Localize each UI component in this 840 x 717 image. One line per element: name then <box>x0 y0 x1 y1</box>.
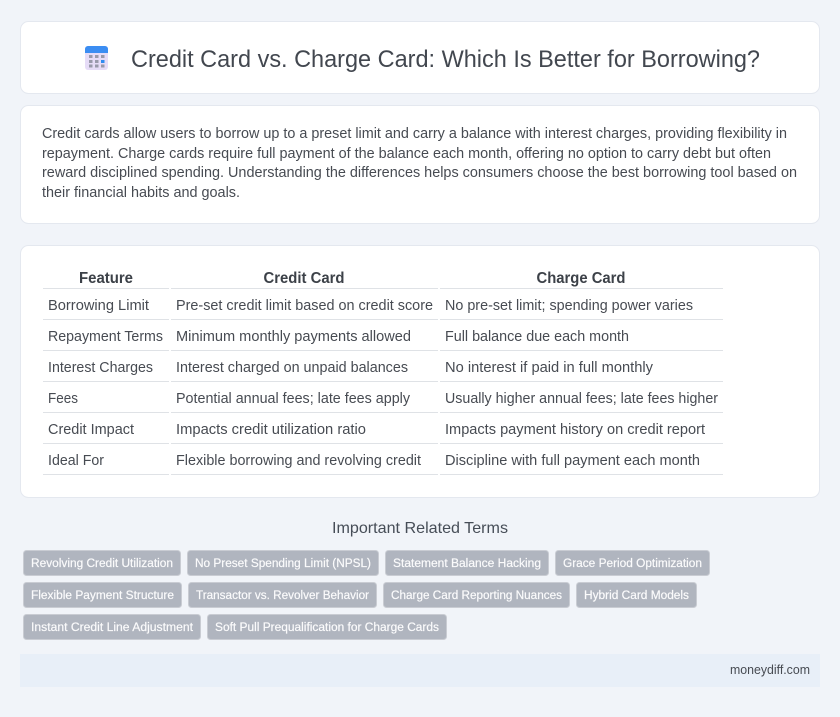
row: interest charges: Interest Charges <box>48 360 153 376</box>
row: fees: Usually higher annual fees; late fees higher <box>445 391 718 407</box>
row: repayment terms: Full balance due each month <box>445 329 629 345</box>
row: ideal for: Flexible borrowing and revolving credit <box>176 453 421 469</box>
row: repayment terms: Minimum monthly payments allowed <box>176 329 411 345</box>
panel: comparison table <box>20 246 820 498</box>
row: borrowing limit: Pre-set credit limit based on credit score <box>176 298 433 314</box>
header panel <box>20 22 820 94</box>
related terms tags: No Preset Spending Limit (NPSL) <box>195 556 371 570</box>
row: borrowing limit: No pre-set limit; spending power varies <box>445 298 693 314</box>
row: borrowing limit <box>48 298 693 314</box>
related terms tags: Hybrid Card Models <box>584 588 689 602</box>
related terms tags: Grace Period Optimization <box>563 556 702 570</box>
table header: Feature <box>79 270 133 287</box>
table header <box>79 270 626 287</box>
related terms tags: Instant Credit Line Adjustment <box>31 620 194 634</box>
row: fees <box>48 391 718 407</box>
related terms tags: Charge Card Reporting Nuances <box>391 588 562 602</box>
panel: intro text: Credit cards allow users to borrow up to a preset limit and carry a balance with interest charges, providing flexibility in <box>42 126 787 142</box>
panel: intro text: repayment. Charge cards require full payment of the balance each month, offering no option to carry debt but often <box>42 146 771 162</box>
title: Credit Card vs. Charge Card: Which Is Better for Borrowing? <box>131 46 760 73</box>
row: borrowing limit: Borrowing Limit <box>48 298 149 314</box>
related terms tags: Soft Pull Prequalification for Charge Cards <box>215 620 439 634</box>
table header: Credit Card <box>264 270 344 287</box>
row: fees: Fees <box>48 391 78 407</box>
row: ideal for: Ideal For <box>48 453 104 469</box>
panel: intro text: reward disciplined spending. Understanding the differences helps consumers choose the best borrowing tool based on <box>42 165 797 181</box>
table header: Charge Card <box>536 270 626 287</box>
row: ideal for: Discipline with full payment each month <box>445 453 700 469</box>
related terms tags: Transactor vs. Revolver Behavior <box>196 588 369 602</box>
row: interest charges: Interest charged on unpaid balances <box>176 360 408 376</box>
icon: calendar <box>85 46 108 70</box>
row: repayment terms: Repayment Terms <box>48 329 163 345</box>
related terms tags: Flexible Payment Structure <box>31 588 174 602</box>
row: credit impact: Impacts credit utilization ratio <box>176 422 366 438</box>
row: credit impact: Credit Impact <box>48 422 134 438</box>
heading: related terms: Important Related Terms <box>332 520 508 537</box>
row: repayment terms <box>48 329 629 345</box>
related terms tags: Statement Balance Hacking <box>393 556 541 570</box>
footer: moneydiff.com <box>730 663 810 677</box>
row: interest charges <box>48 360 654 376</box>
row: credit impact <box>48 422 705 438</box>
row: ideal for <box>48 453 700 469</box>
panel: intro text <box>20 106 820 224</box>
row: fees: Potential annual fees; late fees apply <box>176 391 411 407</box>
footer <box>20 654 820 687</box>
related terms tags: Revolving Credit Utilization <box>31 556 173 570</box>
panel: intro text: their financial habits and goals. <box>42 185 240 201</box>
row: interest charges: No interest if paid in full monthly <box>445 360 654 376</box>
row: credit impact: Impacts payment history on credit report <box>445 422 705 438</box>
related terms tags <box>24 550 710 640</box>
